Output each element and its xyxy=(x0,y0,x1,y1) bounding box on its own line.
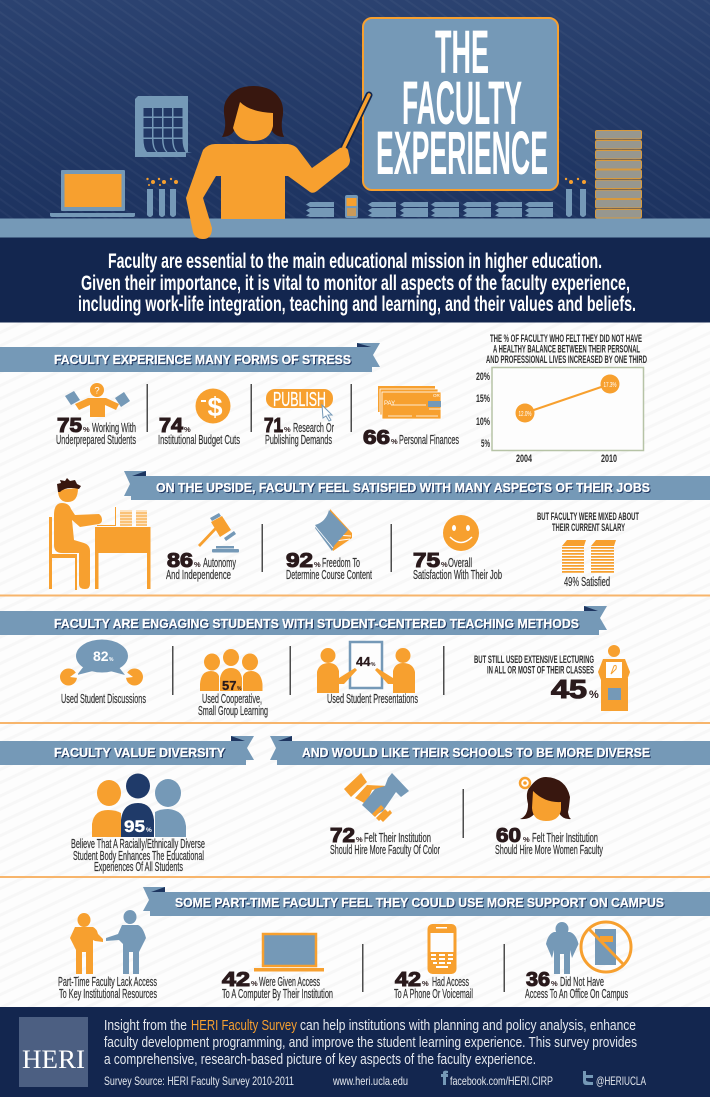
lecturing callout xyxy=(474,645,630,711)
banner: upside: ON THE UPSIDE, FACULTY FEEL SATISFIED WITH MANY ASPECTS OF THEIR JOBS xyxy=(156,481,650,495)
diversity item: 95 percent: Student Body Enhances The Educational xyxy=(73,849,204,863)
icon: calendar xyxy=(135,96,192,157)
icon: facebook xyxy=(441,1071,448,1085)
teaching item: group learning xyxy=(198,649,268,718)
teaching item: group learning: % xyxy=(237,686,242,692)
icon: dollar coin: $ xyxy=(207,392,223,422)
stress item: publishing xyxy=(264,389,334,447)
teaching item: group learning: Small Group Learning xyxy=(198,704,268,718)
footer text: can help institutions with planning and policy analysis, enhance xyxy=(300,1018,636,1034)
line chart xyxy=(476,368,644,465)
diversity item: 95 percent: Experiences Of All Students xyxy=(94,860,183,874)
icon: checks: OR xyxy=(433,393,441,398)
icon: money stacks xyxy=(562,540,616,573)
lecturing callout: % xyxy=(589,689,599,701)
satisfied item: autonomy xyxy=(166,513,239,582)
icon: gavel xyxy=(198,513,239,552)
line chart: 17.3% xyxy=(604,380,617,389)
stress item: personal finances: 66 xyxy=(363,427,390,449)
lecturing callout: IN ALL OR MOST OF THEIR CLASSES xyxy=(487,664,594,676)
salary callout: THEIR CURRENT SALARY xyxy=(552,522,625,534)
stress item: publishing: 71 xyxy=(264,415,283,437)
part-time item: phone: % xyxy=(422,979,429,988)
footer text: HERI Faculty Survey xyxy=(191,1018,298,1034)
icon: presenters and board: 44 xyxy=(356,654,371,669)
teaching item: presentations xyxy=(317,642,418,706)
satisfied item: course content xyxy=(286,509,372,582)
stress item: underprepared students: Working With xyxy=(92,421,136,435)
body xyxy=(186,144,350,239)
banner: part-time faculty: SOME PART-TIME FACULTY FEEL THEY COULD USE MORE SUPPORT ON CAMPUS xyxy=(175,896,664,910)
icon: person with books: ? xyxy=(94,386,100,396)
teaching item: group learning: 57 xyxy=(222,678,236,693)
teaching item: presentations: Used Student Presentations xyxy=(327,692,418,706)
icon: smartphone xyxy=(428,924,456,974)
satisfied item: overall satisfaction: Satisfaction With Their Job xyxy=(413,568,502,582)
diversity item: 95 percent: Believe That A Racially/Ethnically Diverse xyxy=(71,837,205,851)
footer text: Insight from the xyxy=(104,1018,187,1034)
icon: book xyxy=(315,509,352,551)
icon: three diverse people xyxy=(92,774,186,837)
satisfied item: overall satisfaction: Overall xyxy=(448,556,472,570)
diversity item: 95 percent xyxy=(71,774,205,874)
part-time item: phone: 42 xyxy=(395,969,421,991)
banner: engaging students xyxy=(0,606,607,635)
satisfied item: overall satisfaction: 75 xyxy=(413,550,440,572)
part-time item: office: 36 xyxy=(526,969,550,991)
line chart: 10% xyxy=(476,416,490,428)
part-time item: lack of access: Part-Time Faculty Lack Access xyxy=(58,975,157,989)
logo: HERI: HERI xyxy=(22,1045,85,1074)
line chart: 2004 xyxy=(516,453,533,465)
icon: phone xyxy=(345,195,358,218)
icon: checks: PAY xyxy=(384,401,395,407)
teaching item: group learning: Used Cooperative, xyxy=(202,692,262,706)
satisfied item: course content: Determine Course Content xyxy=(286,568,372,582)
banner: engaging students: FACULTY ARE ENGAGING STUDENTS WITH STUDENT-CENTERED TEACHING METHODS xyxy=(54,617,579,631)
icon: three diverse people: % xyxy=(146,827,152,834)
stress item: budget cuts: % xyxy=(184,425,191,434)
part-time item: office: % xyxy=(551,979,558,988)
title sign: FACULTY xyxy=(402,69,522,137)
part-time item: computer xyxy=(222,934,333,1001)
footer links xyxy=(104,1071,646,1088)
banner: more diverse xyxy=(270,736,710,765)
pointer xyxy=(344,95,369,147)
stress item: budget cuts: 74 xyxy=(159,415,184,437)
icon: speech bubble and heads xyxy=(60,640,143,686)
footer links: @HERIUCLA xyxy=(596,1074,646,1088)
icon: test tubes right xyxy=(565,178,586,217)
hair xyxy=(222,86,284,137)
lecturing callout: BUT STILL USED EXTENSIVE LECTURING xyxy=(474,654,594,666)
icon: checks xyxy=(378,386,441,419)
satisfied item: course content: Freedom To xyxy=(322,556,360,570)
diversity item: faculty of color: Should Hire More Faculty Of Color xyxy=(330,843,440,857)
footer links: www.heri.ucla.edu xyxy=(332,1074,408,1088)
icon: two people exchanging xyxy=(70,910,146,974)
icon: woman with flower xyxy=(520,777,571,821)
line chart: 5% xyxy=(481,438,490,450)
icon: test tubes left xyxy=(146,178,178,217)
icon: smiley xyxy=(443,515,479,551)
logo: HERI xyxy=(19,1017,88,1087)
footer panel xyxy=(0,1007,710,1097)
stress item: budget cuts xyxy=(158,388,240,447)
part-time item: computer: To A Computer By Their Institution xyxy=(222,987,333,1001)
icon: handshake xyxy=(344,773,409,822)
part-time item: lack of access xyxy=(58,910,157,1001)
part-time item: computer: 42 xyxy=(222,969,250,991)
icon: laptop xyxy=(50,170,135,217)
diversity item: women faculty: Should Hire More Women Faculty xyxy=(495,843,603,857)
part-time item: office xyxy=(525,922,631,1001)
line chart: 20% xyxy=(476,371,490,383)
part-time item: computer: Were Given Access xyxy=(259,975,320,989)
chart title xyxy=(486,333,647,366)
icon: three diverse people: 95 xyxy=(124,817,145,836)
icon: pencils xyxy=(306,202,553,217)
diversity item: women faculty: Felt Their Institution xyxy=(532,831,598,845)
diversity item: faculty of color: 72 xyxy=(330,825,355,847)
icon: laptop xyxy=(254,934,324,972)
icon: lecturer at podium xyxy=(598,645,630,711)
part-time item: office: Did Not Have xyxy=(560,975,604,989)
banner: part-time faculty xyxy=(143,887,710,916)
satisfied item: course content: % xyxy=(314,560,321,569)
salary callout: 49% Satisfied xyxy=(564,575,610,589)
footer links: Survey Source: HERI Faculty Survey 2010-2011 xyxy=(104,1074,294,1088)
stress item: personal finances xyxy=(363,386,459,449)
stress item: publishing: % xyxy=(284,425,291,434)
stress item: underprepared students: % xyxy=(83,425,90,434)
banner: more diverse: AND WOULD LIKE THEIR SCHOOLS TO BE MORE DIVERSE xyxy=(302,746,650,760)
line chart: 12.0% xyxy=(518,409,532,418)
stress item: underprepared students: Underprepared Students xyxy=(56,433,136,447)
icon: speech bubble and heads: % xyxy=(109,657,114,663)
face xyxy=(233,102,273,141)
icon: presenters and board xyxy=(317,642,415,693)
part-time item: lack of access: To Key Institutional Resources xyxy=(59,987,157,1001)
stress item: personal finances: % xyxy=(391,437,398,446)
teaching item: discussions xyxy=(60,640,146,706)
satisfied item: autonomy: % xyxy=(194,560,201,569)
salary callout xyxy=(537,511,639,589)
icon: person and crossed office door xyxy=(546,922,631,974)
banner: value diversity xyxy=(0,736,254,765)
icon: speech bubble and heads: 82 xyxy=(93,648,109,664)
line chart: 15% xyxy=(476,393,490,405)
part-time item: computer: % xyxy=(251,979,258,988)
stress item: publishing: Publishing Demands xyxy=(265,433,332,447)
counter band xyxy=(0,218,710,238)
satisfied item: overall satisfaction xyxy=(413,515,502,582)
part-time item: office: Access To An Office On Campus xyxy=(525,987,628,1001)
part-time item: phone xyxy=(394,924,473,1001)
footer text: a comprehensive, research-based picture of key aspects of the faculty experience. xyxy=(104,1052,536,1068)
satisfied item: autonomy: And Independence xyxy=(166,568,231,582)
icon: person at desk xyxy=(49,478,150,590)
stress item: personal finances: Personal Finances xyxy=(399,433,459,447)
icon: publish button: PUBLISH xyxy=(273,389,326,411)
diversity item: women faculty xyxy=(495,777,603,857)
footer text xyxy=(104,1018,637,1068)
icon: presenters and board: % xyxy=(371,662,376,668)
line chart: 2010 xyxy=(601,453,617,465)
intro panel xyxy=(0,238,710,322)
stress item: underprepared students xyxy=(56,383,136,447)
banner: stress xyxy=(0,343,380,372)
header illustration xyxy=(0,0,710,239)
diversity item: faculty of color: Felt Their Institution xyxy=(364,831,431,845)
diversity item: faculty of color xyxy=(330,773,440,857)
lecturing callout: 45 xyxy=(551,674,587,704)
satisfied item: overall satisfaction: % xyxy=(441,560,448,569)
stress item: publishing: Research Or xyxy=(293,421,334,435)
title sign: THE xyxy=(435,18,489,86)
teacher figure xyxy=(186,86,369,239)
satisfied item: course content: 92 xyxy=(286,550,313,572)
diversity item: women faculty: % xyxy=(523,835,530,844)
banner: stress: FACULTY EXPERIENCE MANY FORMS OF STRESS xyxy=(54,353,351,367)
stress item: underprepared students: 75 xyxy=(57,415,82,437)
icon: three people xyxy=(200,649,262,691)
satisfied item: autonomy: Autonomy xyxy=(203,556,236,570)
footer links: facebook.com/HERI.CIRP xyxy=(450,1074,553,1088)
icon: book stack xyxy=(596,130,642,218)
title sign xyxy=(363,18,558,190)
icon: twitter xyxy=(583,1071,593,1085)
part-time item: phone: To A Phone Or Voicemail xyxy=(394,987,473,1001)
part-time item: phone: Had Access xyxy=(432,975,469,989)
satisfied item: autonomy: 86 xyxy=(167,550,193,572)
stress item: budget cuts: Institutional Budget Cuts xyxy=(158,433,240,447)
banner: upside xyxy=(124,471,710,500)
banner: value diversity: FACULTY VALUE DIVERSITY xyxy=(54,746,226,760)
diversity item: women faculty: 60 xyxy=(496,825,521,847)
diversity item: faculty of color: % xyxy=(356,835,363,844)
teaching item: discussions: Used Student Discussions xyxy=(61,692,146,706)
